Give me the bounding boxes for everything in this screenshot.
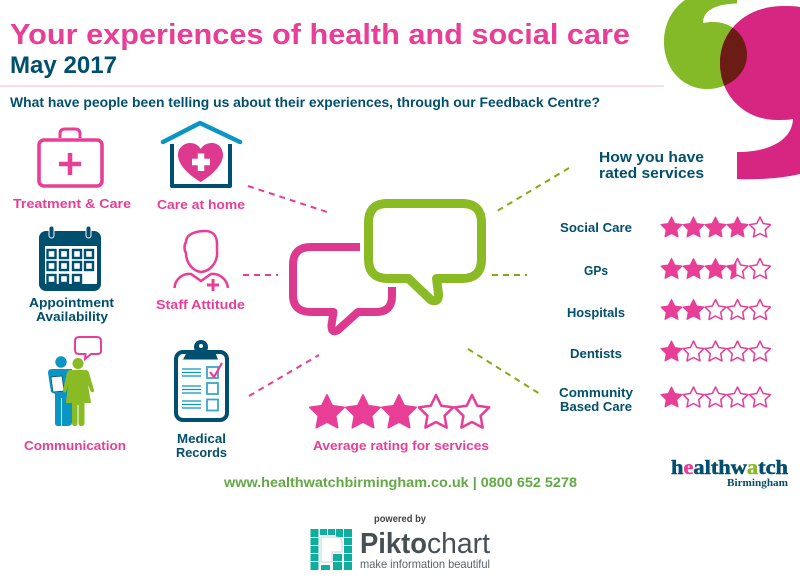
powered by label: powered by bbox=[374, 514, 426, 525]
title: Your experiences of health and social care bbox=[10, 19, 630, 51]
ratings heading bbox=[599, 149, 704, 182]
piktochart logo bbox=[310, 528, 490, 571]
label: Appointment bbox=[29, 295, 115, 310]
icon: staff member bbox=[174, 231, 228, 291]
healthwatch logo bbox=[671, 457, 788, 489]
icon: pink speech bubble bbox=[293, 247, 392, 331]
label: Communication bbox=[24, 438, 126, 453]
ratings heading: How you have bbox=[599, 149, 704, 166]
piktochart logo: chart bbox=[427, 528, 490, 560]
healthwatch logo: Birmingham bbox=[727, 477, 788, 489]
logo mark bbox=[310, 529, 352, 570]
rating row: dentists bbox=[570, 341, 770, 361]
label: Staff Attitude bbox=[156, 297, 245, 312]
panel: appointment availability bbox=[29, 226, 115, 324]
panel: medical records bbox=[176, 340, 227, 460]
label: Medical bbox=[177, 431, 226, 446]
icon: two people talking bbox=[48, 337, 101, 426]
rating row: social care: Social Care bbox=[560, 220, 632, 235]
icon: clipboard checklist bbox=[176, 340, 227, 420]
logo wordmark: Pikto bbox=[360, 528, 427, 560]
rating row: GPs bbox=[584, 258, 770, 278]
healthwatch logo: healthw atch bbox=[671, 457, 788, 479]
rating row: community based care: Community bbox=[559, 385, 634, 400]
date subtitle: May 2017 bbox=[10, 52, 117, 79]
icon: medical case bbox=[39, 129, 102, 186]
rating row: GPs: GPs bbox=[584, 263, 608, 278]
panel: treatment and care bbox=[13, 129, 131, 211]
ratings heading: rated services bbox=[599, 165, 704, 182]
label: Treatment & Care bbox=[13, 196, 131, 211]
icon: green speech bubble bbox=[368, 204, 482, 301]
rating row: social care bbox=[560, 217, 770, 237]
panel: staff attitude bbox=[156, 231, 245, 312]
panel: medical records: Records bbox=[176, 445, 227, 460]
panel: care at home bbox=[157, 123, 245, 212]
icon: calendar bbox=[39, 226, 101, 291]
rating row: community based care bbox=[559, 385, 770, 414]
average rating stars bbox=[310, 395, 489, 428]
label: Care at home bbox=[157, 197, 245, 212]
contact details: www.healthwatchbirmingham.co.uk | 0800 652 5278 bbox=[223, 474, 577, 490]
rating row: dentists: Dentists bbox=[570, 346, 622, 361]
rating row: hospitals: Hospitals bbox=[567, 305, 625, 320]
panel: communication bbox=[24, 337, 126, 453]
rating row: hospitals bbox=[567, 300, 770, 320]
panel: appointment availability: Availability bbox=[36, 309, 109, 324]
intro question: What have people been telling us about their experiences, through our Feedback Centre? bbox=[10, 94, 600, 110]
average rating label: Average rating for services bbox=[313, 438, 489, 453]
icon: quotation marks bbox=[664, 0, 800, 179]
logo tagline: make information beautiful bbox=[360, 557, 490, 571]
rating row: community based care: Based Care bbox=[560, 399, 632, 414]
icon: house with heart bbox=[163, 123, 240, 186]
